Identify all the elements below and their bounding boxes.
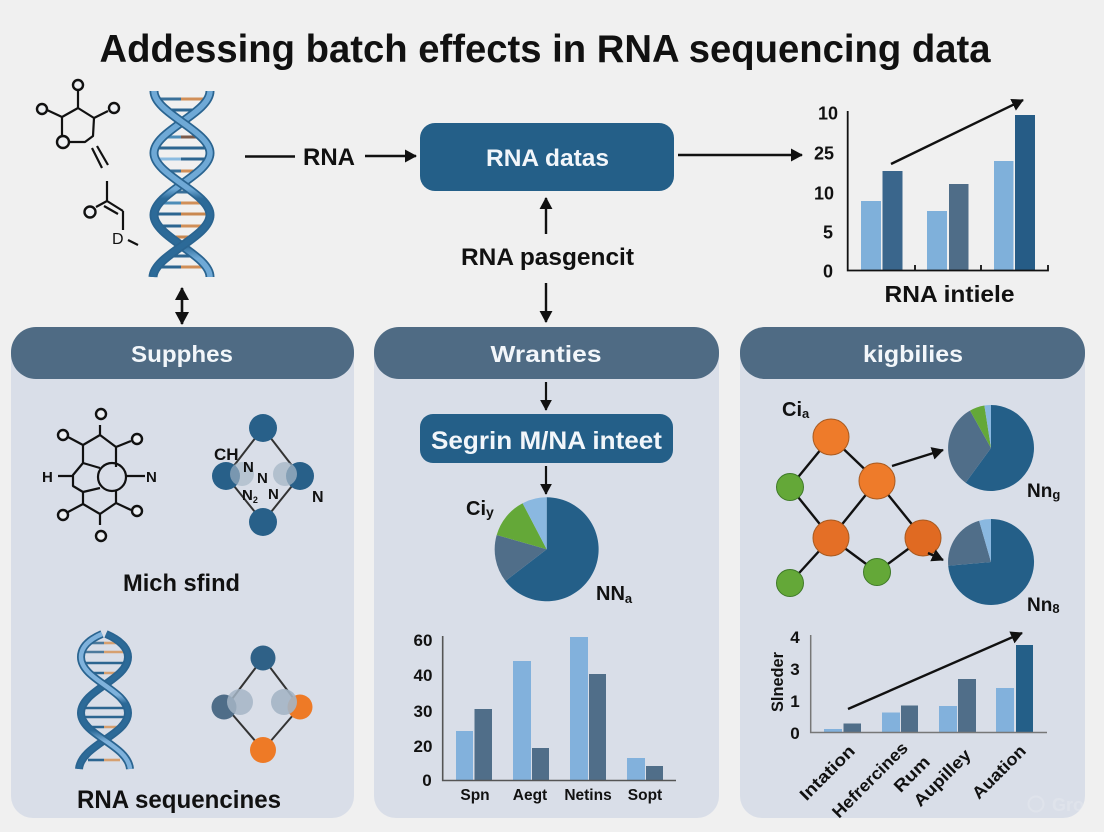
box: RNA datas — [420, 123, 674, 191]
arrow: up to data box — [545, 198, 547, 234]
chart: right bar chart: 4 — [790, 628, 800, 647]
icon: blue atom network: CH — [214, 445, 239, 464]
chart: top bar chart — [814, 100, 1048, 282]
chart: center bar chart: Aegt — [513, 787, 547, 804]
icon: blue atom network — [212, 414, 324, 536]
icon: blue atom network: N — [257, 470, 268, 487]
chart: right bar chart: Slneder — [768, 652, 787, 712]
box: Segrin M/NA inteet — [420, 414, 673, 463]
arrow: network to lower pie — [928, 553, 943, 560]
arrow: data box to chart — [678, 154, 802, 156]
chart: center pie — [495, 497, 599, 601]
arrow: network to upper pie — [892, 450, 943, 466]
watermark: Grok: Gro — [1052, 795, 1084, 815]
chart: right bar chart: Rum — [890, 752, 934, 796]
chart: center bar chart: 30 — [414, 702, 432, 721]
chart: top bar chart: 10 — [818, 104, 838, 124]
label: NNa: NN — [596, 583, 625, 605]
icon: blue atom network: N — [312, 489, 324, 506]
icon: blue atom network: N — [243, 459, 254, 476]
watermark: Grok — [1028, 795, 1084, 815]
icon: small DNA helix — [79, 634, 130, 769]
label: Nng upper: g — [1052, 487, 1060, 502]
label: Cia: Ci — [782, 399, 802, 421]
chart: center bar chart: 0 — [422, 771, 432, 790]
chart: center bar chart: Spn — [460, 787, 490, 804]
panel header: Wranties: Wranties — [490, 341, 602, 367]
arrow: double-headed under helix — [181, 288, 183, 324]
icon: fused ring molecule: H — [42, 469, 53, 486]
label: Nng lower: 8 — [1052, 601, 1060, 616]
icon: sugar molecule — [37, 80, 138, 248]
chart: center bar chart: 20 — [414, 737, 432, 756]
icon: sugar molecule: D — [112, 231, 124, 248]
chart: right bar chart: 3 — [790, 660, 800, 679]
panel header: Supphes — [11, 327, 354, 379]
panel: center Wranties — [374, 327, 719, 818]
arrow: RNA to data box — [365, 155, 416, 157]
panel header: kigbilies — [740, 327, 1085, 379]
box: RNA datas: RNA datas — [486, 145, 609, 172]
chart: center bar chart: 40 — [414, 666, 432, 685]
chart: upper pie — [948, 405, 1034, 491]
chart: right bar chart: Hefrercines — [828, 738, 912, 822]
network: orange and green nodes — [776, 419, 941, 596]
arrow: header to box — [545, 382, 547, 410]
chart: right bar chart: 1 — [790, 692, 800, 711]
label: RNA pasgencit: RNA pasgencit — [461, 244, 634, 271]
panel: right kigbilies — [740, 327, 1085, 822]
icon: blue atom network: 2 — [253, 495, 258, 505]
chart: center bar chart: 60 — [414, 631, 432, 650]
label: RNA intiele: RNA intiele — [884, 281, 1014, 307]
arrow: line to RNA — [245, 155, 295, 158]
label: Nng upper: Nn — [1027, 481, 1052, 502]
panel header: kigbilies: kigbilies — [863, 341, 963, 367]
chart: right bar chart: 0 — [790, 724, 800, 743]
chart: center bar chart: Netins — [564, 787, 612, 804]
chart: top bar chart: 0 — [823, 262, 833, 282]
chart: top bar chart: 25 — [814, 144, 834, 164]
label: RNA sequencines: RNA sequencines — [77, 786, 281, 814]
chart: top bar chart: 10 — [814, 184, 834, 204]
box: Segrin M/NA inteet: Segrin M/NA inteet — [431, 427, 663, 455]
label: Ciy: Ci — [466, 498, 486, 520]
icon: fused ring molecule: N — [146, 469, 157, 486]
chart: right bar chart — [768, 628, 1047, 822]
panel: left Supphes — [11, 327, 354, 818]
panel header: Supphes: Supphes — [131, 341, 233, 367]
label: Cia: a — [802, 406, 810, 421]
arrow: down to center panel — [545, 283, 547, 322]
title: Addessing batch effects in RNA sequencing data — [100, 28, 991, 71]
label: Nng lower: Nn — [1027, 595, 1052, 616]
icon: blue atom network: N — [268, 486, 279, 503]
chart: right bar chart: Auation — [968, 741, 1030, 803]
label: RNA: RNA — [303, 144, 355, 171]
chart: lower pie — [948, 519, 1034, 605]
label: NNa: a — [625, 591, 633, 606]
icon: fused ring molecule — [42, 409, 157, 541]
chart: center bar chart: Sopt — [628, 787, 662, 804]
chart: right bar chart: Aupilley — [910, 745, 975, 810]
arrow: box to pie — [545, 466, 547, 494]
icon: blue atom network: N — [242, 487, 253, 504]
label: Ciy: y — [486, 504, 494, 520]
label: Mich sfind: Mich sfind — [123, 570, 240, 597]
icon: orange and blue node network — [212, 646, 312, 763]
chart: right bar chart: Intation — [796, 741, 859, 804]
chart: top bar chart: 5 — [823, 222, 833, 242]
panel header: Wranties — [374, 327, 719, 379]
icon: DNA double helix — [153, 91, 210, 277]
chart: center bar chart — [414, 631, 676, 804]
